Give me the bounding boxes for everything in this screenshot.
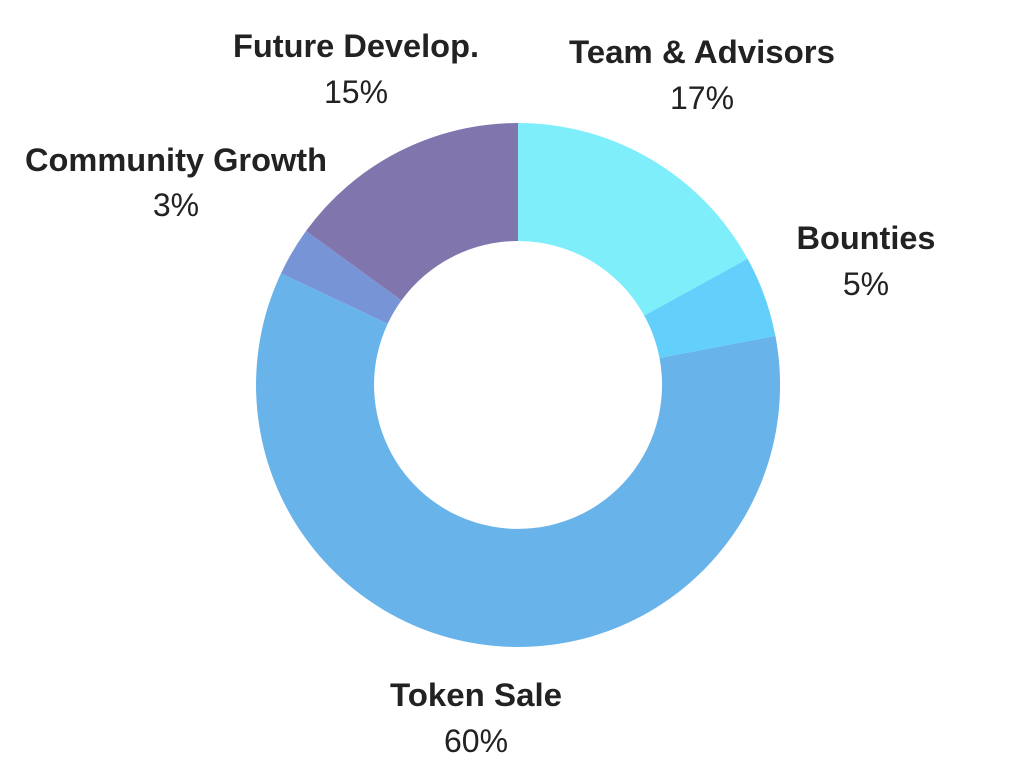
label: Community Growth 3% (25, 142, 327, 223)
label: Bounties 5%: Bounties (796, 220, 936, 256)
segment: Team & Advisors 17% (518, 123, 748, 316)
segment: Community Growth 3% (281, 231, 402, 324)
label: Team & Advisors 17%: Team & Advisors (569, 34, 835, 70)
segment: Future Develop. 15% (306, 123, 518, 300)
label: Community Growth 3%: Community Growth (25, 142, 327, 178)
label: Future Develop. 15%: Future Develop. (233, 28, 479, 64)
label: Team & Advisors 17% (569, 34, 835, 116)
label: Future Develop. 15% (233, 28, 479, 110)
label: Team & Advisors 17%: 17% (670, 80, 734, 116)
label: Bounties 5% (796, 220, 936, 302)
segment: Token Sale 60% (256, 273, 780, 647)
label: Token Sale 60% (390, 677, 562, 759)
label: Token Sale 60%: Token Sale (390, 677, 562, 713)
label: Community Growth 3%: 3% (153, 187, 199, 223)
segment: Bounties 5% (644, 259, 775, 358)
label: Token Sale 60%: 60% (444, 723, 508, 759)
donut chart (256, 123, 780, 647)
label: Bounties 5%: 5% (843, 266, 889, 302)
label: Future Develop. 15%: 15% (324, 74, 388, 110)
